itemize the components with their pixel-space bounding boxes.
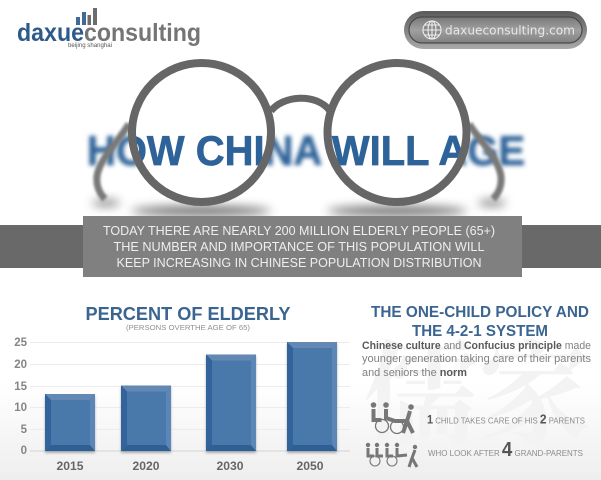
logo wordmark blue: daxue: [17, 19, 84, 47]
website text: daxueconsulting.com: [445, 22, 575, 38]
website button: [404, 11, 587, 49]
policy paragraph: [362, 340, 591, 379]
bar 2015: [45, 394, 95, 451]
row 2 caption: WHO LOOK AFTER 4 GRAND-PARENTS: [428, 439, 583, 461]
logo bars icon: [76, 8, 97, 25]
left temple: [97, 124, 129, 199]
bar chart: [14, 337, 350, 473]
logo wordmark grey: consulting: [84, 19, 201, 47]
y axis labels: [14, 337, 28, 457]
chart subheading: (PERSONS OVERTHE AGE OF 65): [126, 323, 251, 332]
lens interiors: [132, 62, 467, 202]
banner text: [103, 223, 495, 270]
banner text: TODAY THERE ARE NEARLY 200 MILLION ELDERLY PEOPLE (65+): [103, 223, 495, 238]
y axis labels: 0: [21, 445, 27, 457]
policy paragraph: Chinese culture and Confucius principle made: [362, 340, 591, 352]
icon: child pushing two parents in wheelchairs: [371, 402, 414, 434]
y axis labels: 25: [14, 337, 28, 349]
watermark: Chinese characters: 儒家: [364, 305, 592, 469]
x axis labels: [56, 461, 324, 473]
banner text: THE NUMBER AND IMPORTANCE OF THIS POPULATION WILL: [114, 239, 484, 254]
y axis labels: 20: [14, 359, 27, 371]
policy paragraph: younger generation taking care of their parents: [362, 353, 591, 365]
chart heading: PERCENT OF ELDERLY: [86, 303, 291, 324]
bridge: [271, 98, 330, 111]
glasses: [97, 63, 501, 202]
policy paragraph: and seniors the norm: [362, 367, 467, 379]
bar 2020: [121, 386, 171, 451]
lens shadows: [92, 200, 506, 216]
y axis labels: 5: [21, 424, 28, 436]
x axis labels: 2020: [132, 461, 160, 473]
bars shadow: [45, 344, 337, 453]
y axis labels: 10: [14, 402, 27, 414]
x axis labels: 2050: [296, 461, 324, 473]
icon: child pushing four grandparents in wheelchairs: [366, 443, 417, 467]
row 1 caption: 1 CHILD TAKES CARE OF HIS 2 PARENTS: [427, 412, 585, 426]
title sharp through lenses: HOW CHINA WILL AGE: [87, 127, 525, 174]
y axis labels: 15: [14, 381, 28, 393]
icon: globe: [423, 21, 441, 39]
logo tagline: beijing shanghai: [68, 43, 112, 49]
logo: [17, 8, 201, 49]
title blurred: HOW CHINA WILL AGE: [87, 127, 525, 174]
banner band: [0, 225, 601, 268]
x axis labels: 2030: [216, 461, 244, 473]
bar 2030: [206, 354, 256, 451]
policy heading: [371, 304, 589, 340]
x axis labels: 2015: [56, 461, 84, 473]
left lens: [132, 63, 271, 202]
banner panel: [83, 216, 522, 277]
banner text: KEEP INCREASING IN CHINESE POPULATION DISTRIBUTION: [116, 255, 482, 270]
right temple: [469, 124, 501, 199]
policy heading: THE ONE-CHILD POLICY AND: [371, 304, 589, 321]
right lens: [328, 63, 466, 202]
bar 2050: [287, 342, 337, 451]
policy heading: THE 4-2-1 SYSTEM: [412, 323, 548, 340]
